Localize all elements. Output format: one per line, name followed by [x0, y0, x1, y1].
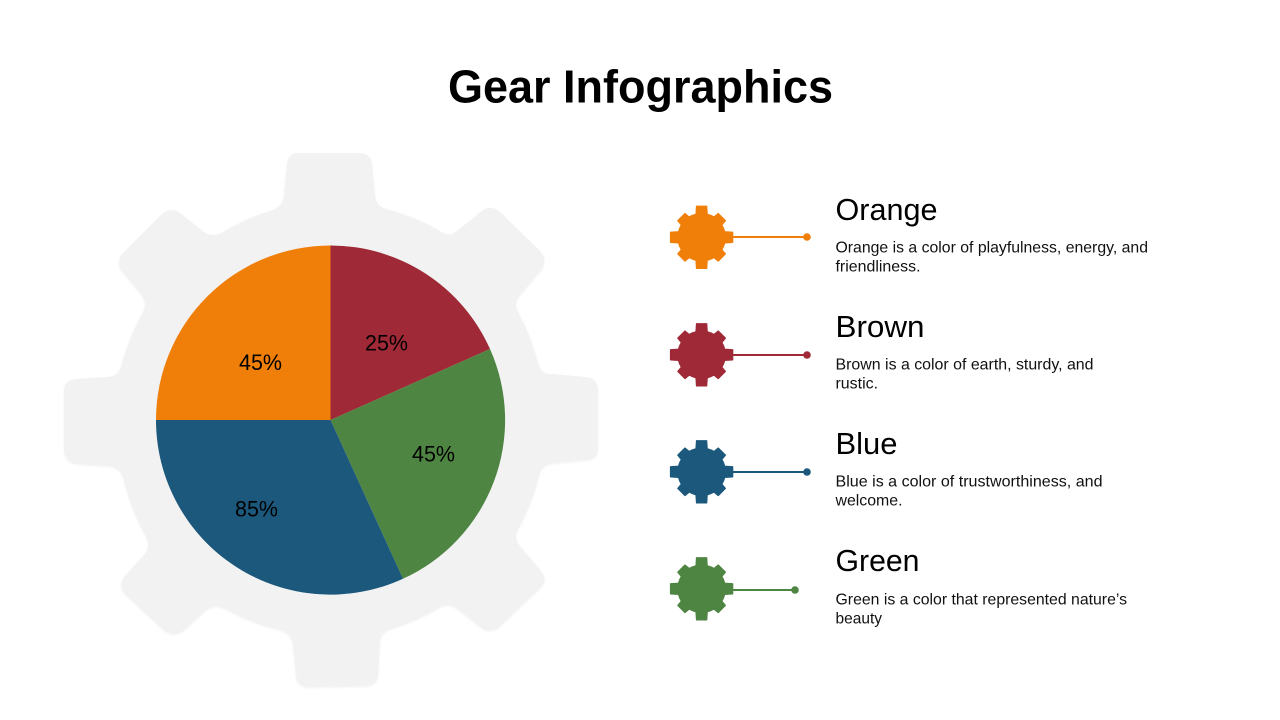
description: Green is a color that represented nature’s — [836, 592, 1127, 608]
label: green 45%: 45% — [412, 442, 455, 466]
label: blue 85%: 85% — [235, 496, 278, 522]
heading: Brown — [836, 309, 924, 344]
connector line — [730, 468, 811, 476]
panel: orange legend item — [671, 192, 1148, 276]
icon: orange gear — [671, 206, 733, 268]
pie slice: brown — [330, 245, 490, 420]
label: orange 45%: 45% — [239, 350, 282, 375]
label: brown 25%: 25% — [365, 330, 408, 356]
panel: green legend item — [671, 543, 1127, 628]
panel: large gear with pie chart — [64, 153, 598, 687]
icon: blue gear — [671, 441, 733, 503]
connector line — [730, 351, 811, 359]
description: rustic. — [836, 376, 878, 392]
description: beauty — [836, 610, 882, 628]
icon: brown gear — [671, 324, 733, 386]
pie slice: orange — [156, 246, 330, 420]
connector line — [730, 233, 811, 241]
description: friendliness. — [836, 258, 920, 276]
description: Orange is a color of playfulness, energy, and — [836, 240, 1148, 256]
connector line — [730, 586, 799, 594]
description: Blue is a color of trustworthiness, and — [836, 474, 1102, 490]
heading: Blue — [836, 426, 898, 461]
panel: brown legend item — [671, 309, 1094, 392]
pie chart — [156, 245, 505, 595]
heading: Green — [836, 543, 920, 578]
icon: green gear — [671, 558, 733, 620]
title: Gear Infographics — [448, 60, 833, 112]
heading: Orange — [836, 192, 938, 227]
large gear background — [64, 153, 598, 687]
description: welcome. — [835, 492, 902, 510]
pie slice: green — [330, 349, 505, 579]
description: Brown is a color of earth, sturdy, and — [836, 356, 1094, 374]
pie slice: blue — [156, 420, 403, 595]
panel: blue legend item — [671, 426, 1102, 510]
